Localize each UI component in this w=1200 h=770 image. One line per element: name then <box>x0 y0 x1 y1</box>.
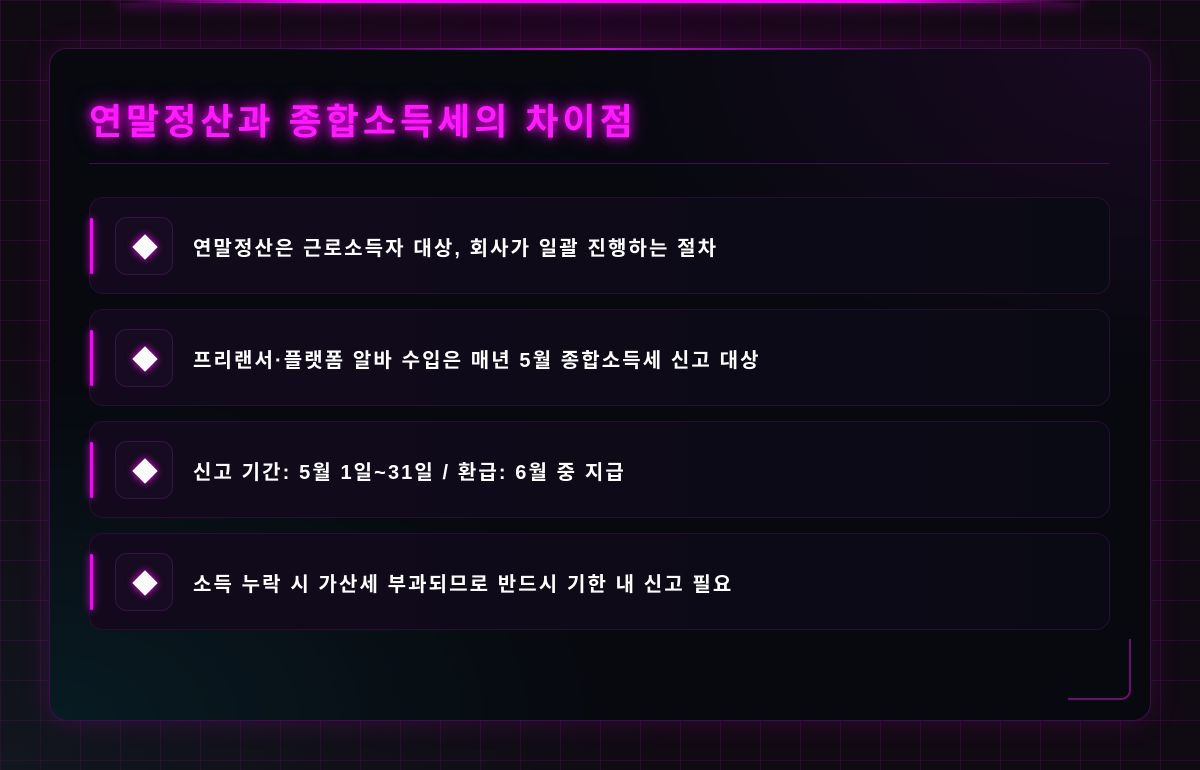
title: 연말정산과 종합소득세의 차이점 <box>89 101 637 142</box>
text 3: 신고 기간: 5월 1일~31일 / 환급: 6월 중 지급 <box>193 462 626 484</box>
item 2 <box>89 309 1110 406</box>
item 1 <box>89 197 1110 294</box>
icon: diamond <box>115 553 173 611</box>
item 3 <box>89 421 1110 518</box>
text 4: 소득 누락 시 가산세 부과되므로 반드시 기한 내 신고 필요 <box>193 574 733 596</box>
text 1: 연말정산은 근로소득자 대상, 회사가 일괄 진행하는 절차 <box>193 238 718 260</box>
item 4 <box>89 533 1110 630</box>
icon: diamond <box>115 217 173 275</box>
icon: diamond <box>115 441 173 499</box>
icon: diamond <box>115 329 173 387</box>
text 2: 프리랜서·플랫폼 알바 수입은 매년 5월 종합소득세 신고 대상 <box>193 350 761 372</box>
